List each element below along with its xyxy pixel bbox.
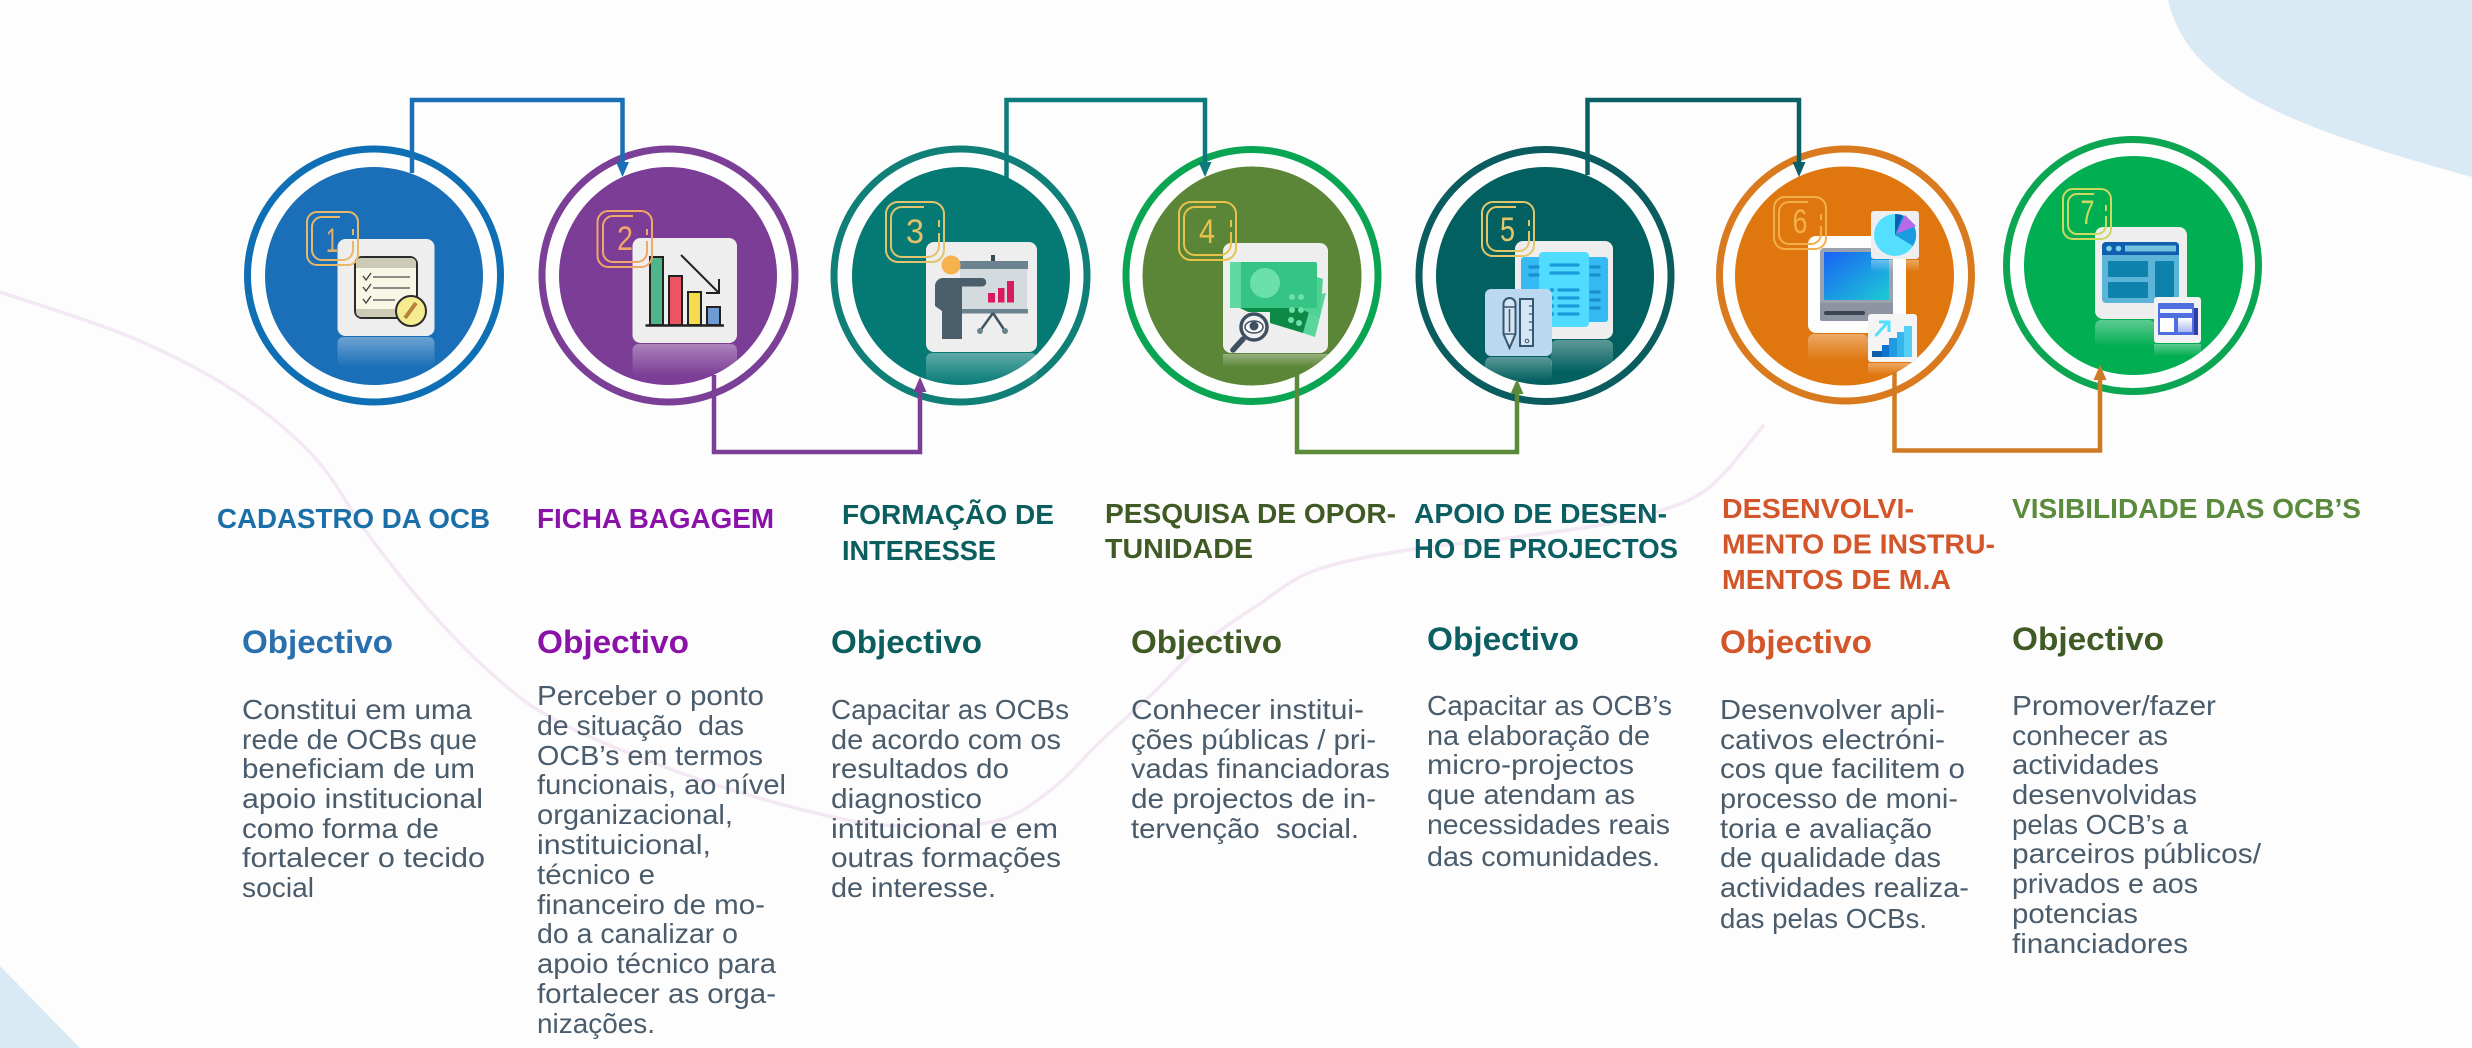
arrow: step 6 to 7: [1894, 365, 2106, 450]
badge: number 1: 1: [326, 222, 338, 260]
step 7 circle and icon: [2006, 140, 2258, 392]
body text: step 1: beneficiam de um: [242, 753, 475, 784]
body text: step 3: diagnostico: [831, 783, 982, 814]
body text: step 5: [1427, 690, 1672, 872]
body text: step 6: processo de moni-: [1720, 783, 1958, 814]
badge: number 2: [598, 211, 652, 267]
heading: Apoio de desenho de projectos: [1414, 498, 1678, 564]
body text: step 3: Capacitar as OCBs: [831, 694, 1069, 725]
heading: Apoio de desenho de projectos: APOIO DE DESEN-: [1414, 498, 1667, 529]
body text: step 4: vadas financiadoras: [1131, 753, 1390, 784]
heading: Cadastro da OCB: CADASTRO DA OCB: [217, 503, 490, 534]
body text: step 1: social: [242, 872, 314, 903]
body text: step 2: de situação das: [537, 710, 744, 741]
step 1 circle and icon: [248, 149, 500, 402]
body text: step 2: apoio técnico para: [537, 948, 777, 979]
step 3 circle and icon: [834, 149, 1087, 402]
badge: number 4: 4: [1199, 213, 1215, 251]
body text: step 7: desenvolvidas: [2012, 779, 2197, 810]
body text: step 7: actividades: [2012, 749, 2159, 780]
heading: Ficha bagagem: FICHA BAGAGEM: [537, 503, 774, 534]
heading: Desenvolvimento de instrumentos: MENTOS DE M.A: [1722, 564, 1951, 595]
badge: number 7: [2063, 189, 2111, 239]
arrow: step 4 to 5: [1297, 375, 1524, 452]
body text: step 5: necessidades reais: [1427, 809, 1670, 840]
body text: step 1: como forma de: [242, 813, 439, 844]
body text: step 7: [2012, 690, 2261, 959]
body text: step 6: actividades realiza-: [1720, 872, 1969, 903]
heading: Desenvolvimento de instrumentos: MENTO DE INSTRU-: [1722, 528, 1995, 560]
body text: step 2: [537, 680, 786, 1039]
body text: step 5: na elaboração de: [1427, 720, 1650, 751]
subheading: Objectivo 4: Objectivo: [1131, 624, 1282, 660]
arrow: step 5 to 6: [1588, 100, 1806, 177]
badge: number 2: 2: [617, 220, 633, 258]
body text: step 2: técnico e: [537, 859, 655, 890]
body text: step 5: micro-projectos: [1427, 749, 1634, 780]
subheading: Objectivo 6: Objectivo: [1720, 624, 1872, 660]
heading: Apoio de desenho de projectos: HO DE PROJECTOS: [1414, 533, 1678, 564]
body text: step 3: [831, 694, 1069, 903]
body text: step 2: financeiro de mo-: [537, 889, 765, 920]
body text: step 6: das pelas OCBs.: [1720, 903, 1927, 934]
heading: Desenvolvimento de instrumentos: [1722, 493, 1995, 595]
body text: step 4: [1131, 694, 1390, 844]
heading: Formação de interesse: FORMAÇÃO DE: [842, 499, 1054, 530]
badge: number 1: [307, 212, 358, 265]
step 5 circle and icon: [1419, 150, 1671, 402]
body text: step 6: [1720, 694, 1969, 934]
subheading: Objectivo 3: Objectivo: [831, 624, 982, 660]
arrow: step 1 to 2: [412, 100, 629, 177]
icon: bar chart card: [632, 238, 737, 376]
heading: Pesquisa de oportunidade: TUNIDADE: [1105, 533, 1253, 564]
heading: Desenvolvimento de instrumentos: DESENVOLVI-: [1722, 493, 1914, 524]
background blob: bottom left: [0, 966, 80, 1048]
body text: step 3: de interesse.: [831, 872, 996, 903]
icon: presenter card: [926, 242, 1037, 385]
body text: step 4: de projectos de in-: [1131, 783, 1376, 814]
body text: step 6: cativos electróni-: [1720, 724, 1945, 755]
body text: step 2: nizações.: [537, 1008, 655, 1039]
step 4 circle and icon: [1126, 150, 1378, 402]
body text: step 6: toria e avaliação: [1720, 813, 1932, 844]
badge: number 3: [886, 202, 944, 262]
badge: number 7: 7: [2080, 194, 2094, 232]
badge: number 6: [1774, 197, 1826, 249]
body text: step 3: intituicional e em: [831, 813, 1058, 844]
heading: Formação de interesse: INTERESSE: [842, 535, 996, 566]
body text: step 7: pelas OCB’s a: [2012, 809, 2189, 840]
body text: step 3: resultados do: [831, 753, 1009, 784]
body text: step 7: privados e aos: [2012, 868, 2198, 899]
body text: step 2: Perceber o ponto: [537, 680, 764, 711]
badge: number 6: 6: [1792, 203, 1808, 241]
icon: documents card: [1485, 241, 1613, 381]
body text: step 4: ções públicas / pri-: [1131, 724, 1376, 755]
body text: step 2: funcionais, ao nível: [537, 769, 786, 800]
body text: step 2: fortalecer as orga-: [537, 978, 776, 1009]
body text: step 2: organizacional,: [537, 799, 733, 830]
icon: money and magnifier card: [1223, 243, 1328, 367]
body text: step 7: conhecer as: [2012, 720, 2168, 751]
body text: step 1: Constitui em uma: [242, 694, 473, 725]
heading: Formação de interesse: [842, 499, 1054, 566]
body text: step 7: parceiros públicos/: [2012, 838, 2261, 869]
body text: step 7: potencias: [2012, 898, 2138, 929]
body text: step 2: do a canalizar o: [537, 918, 738, 949]
subheading: Objectivo 2: Objectivo: [537, 624, 689, 660]
step 6 circle and icon: [1720, 149, 1972, 401]
heading: Pesquisa de oportunidade: [1105, 498, 1396, 564]
subheading: Objectivo 1: Objectivo: [242, 624, 393, 660]
body text: step 4: Conhecer institui-: [1131, 694, 1364, 725]
step 2 circle and icon: [542, 149, 795, 402]
heading: Pesquisa de oportunidade: PESQUISA DE OPOR-: [1105, 498, 1396, 529]
body text: step 1: fortalecer o tecido: [242, 842, 485, 873]
body text: step 1: apoio institucional: [242, 783, 483, 814]
body text: step 1: rede de OCBs que: [242, 724, 477, 755]
background curve: [0, 292, 1764, 826]
badge: number 5: [1482, 202, 1534, 256]
icon: monitor and charts: [1808, 211, 1919, 375]
heading: Visibilidade das OCB's: VISIBILIDADE DAS OCB’S: [2012, 493, 2361, 524]
body text: step 4: tervenção social.: [1131, 813, 1359, 844]
subheading: Objectivo 7: Objectivo: [2012, 621, 2164, 657]
icon: checklist card: [338, 239, 434, 367]
body text: step 5: Capacitar as OCB’s: [1427, 690, 1672, 721]
body text: step 7: financiadores: [2012, 928, 2188, 959]
body text: step 5: das comunidades.: [1427, 841, 1660, 872]
body text: step 7: Promover/fazer: [2012, 690, 2216, 721]
body text: step 6: de qualidade das: [1720, 842, 1941, 873]
body text: step 5: que atendam as: [1427, 779, 1635, 810]
body text: step 6: cos que facilitem o: [1720, 753, 1965, 784]
body text: step 1: [242, 694, 485, 903]
badge: number 4: [1179, 202, 1236, 260]
badge: number 5: 5: [1500, 211, 1515, 249]
badge: number 3: 3: [906, 213, 924, 251]
icon: web window card: [2095, 227, 2201, 356]
arrow: step 2 to 3: [714, 375, 926, 452]
body text: step 6: Desenvolver apli-: [1720, 694, 1945, 725]
body text: step 3: outras formações: [831, 842, 1061, 873]
body text: step 2: OCB’s em termos: [537, 740, 763, 771]
arrow: step 3 to 4: [1006, 100, 1212, 178]
background blob: top right: [2168, 0, 2472, 177]
body text: step 3: de acordo com os: [831, 724, 1061, 755]
subheading: Objectivo 5: Objectivo: [1427, 621, 1579, 657]
body text: step 2: instituicional,: [537, 829, 711, 860]
